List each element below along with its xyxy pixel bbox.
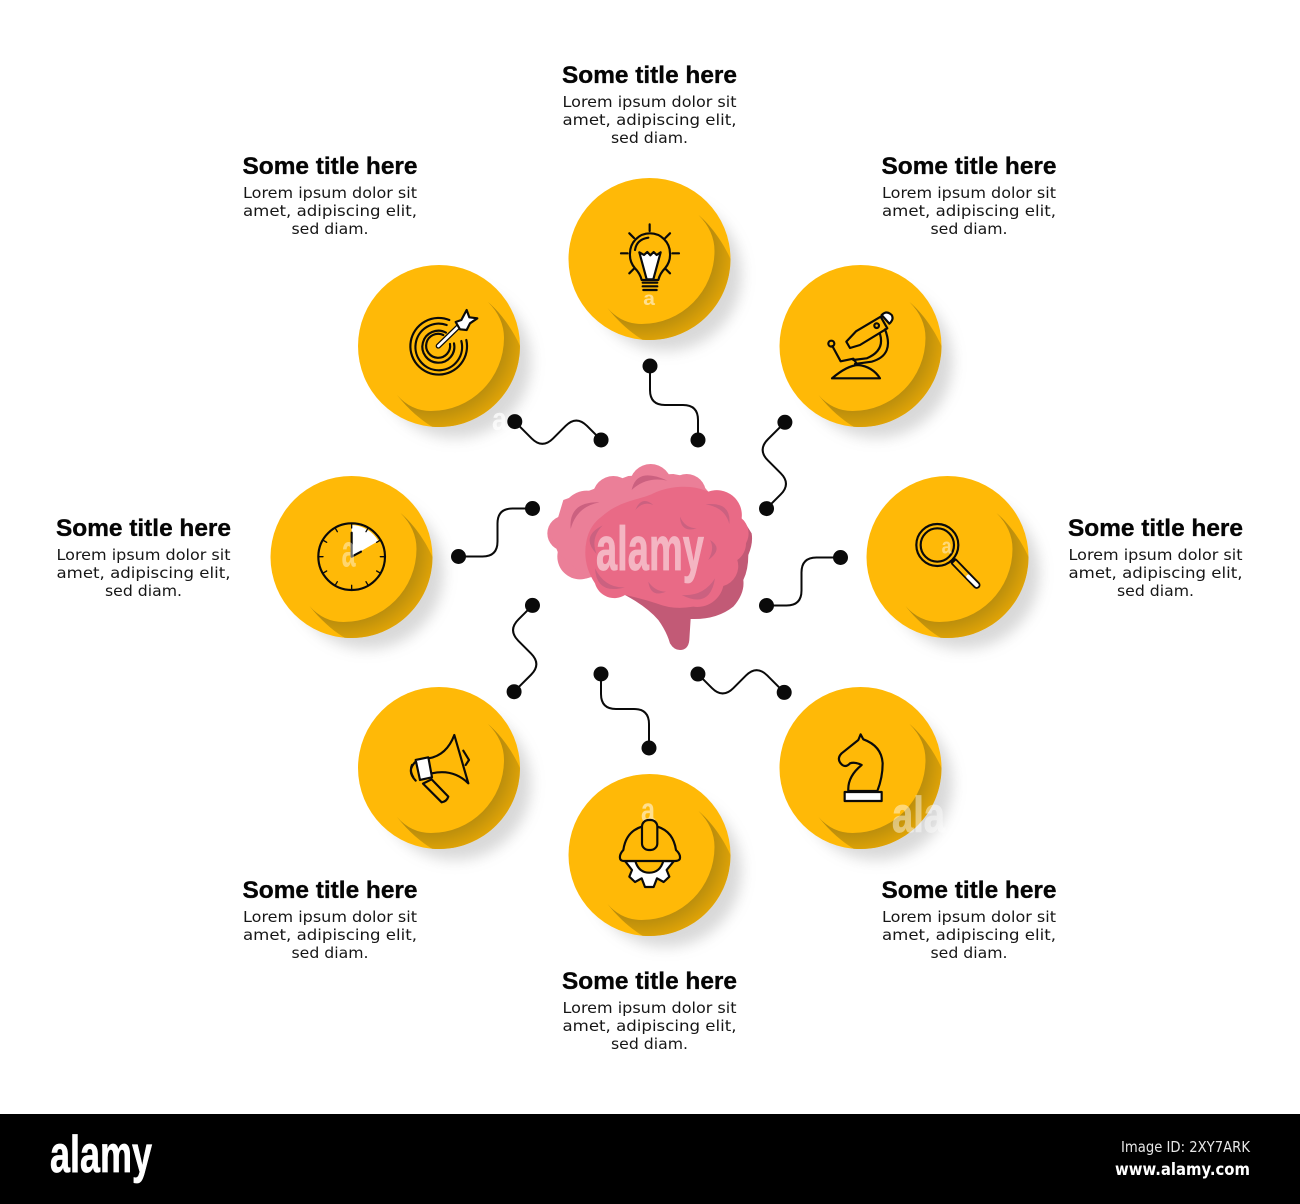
text: right: sed diam. <box>1117 582 1194 600</box>
title: bottom right: Some title here <box>882 877 1056 904</box>
icon: helmet and gear <box>620 792 680 887</box>
icon: chess knight <box>839 734 883 801</box>
connectors <box>451 358 848 756</box>
connector: bottom right <box>687 629 795 737</box>
watermark: alamy on brain: alamy <box>596 515 704 584</box>
text: bottom right: sed diam. <box>930 944 1008 962</box>
title: right: Some title here <box>1068 515 1243 542</box>
brain back lobe <box>547 464 708 579</box>
text: right <box>1068 546 1242 600</box>
connector: top right <box>722 412 829 519</box>
text: top <box>562 93 736 147</box>
text: bottom right <box>882 908 1056 962</box>
text: top: Lorem ipsum dolor sit <box>562 93 736 111</box>
circle: bottom right <box>780 687 952 860</box>
title: top right: Some title here <box>882 153 1056 180</box>
panel: bottom step <box>562 774 742 1053</box>
text: top: sed diam. <box>611 129 688 147</box>
panel: right step <box>866 476 1243 649</box>
text: top left: sed diam. <box>292 220 368 238</box>
connector: bottom <box>594 666 656 756</box>
text: top left <box>243 184 417 238</box>
text: top right <box>882 184 1056 238</box>
circle: top right <box>780 265 952 438</box>
panel: top step <box>562 62 742 351</box>
connector: right <box>759 550 848 613</box>
panel: bottom right step <box>780 687 1056 962</box>
connector: top <box>642 358 706 448</box>
connector: bottom left <box>470 595 577 702</box>
text: right: Lorem ipsum dolor sit <box>1068 546 1242 564</box>
footer bar <box>0 1114 1300 1204</box>
text: bottom left: Lorem ipsum dolor sit <box>243 908 417 926</box>
circle: left <box>270 476 444 649</box>
icon: microscope <box>828 312 893 378</box>
title: top: Some title here <box>562 62 737 89</box>
icon: magnifier <box>916 524 977 585</box>
title: bottom left: Some title here <box>242 877 418 904</box>
panel: bottom left step <box>242 687 531 962</box>
connector: top left <box>504 377 612 485</box>
title: left: Some title here <box>56 515 231 542</box>
brain folds <box>570 475 730 600</box>
text: top right: Lorem ipsum dolor sit <box>882 184 1056 202</box>
brain front lobe <box>585 487 749 608</box>
text: left: sed diam. <box>105 582 182 600</box>
text: bottom left <box>243 908 417 962</box>
icon: megaphone <box>411 735 469 802</box>
text: left <box>56 546 230 600</box>
circle: top left <box>358 265 531 438</box>
title: bottom: Some title here <box>562 968 737 995</box>
footer image id: Image ID: 2XY7ARK <box>1121 1138 1251 1156</box>
text: bottom left: sed diam. <box>292 944 368 962</box>
text: top left: Lorem ipsum dolor sit <box>243 184 417 202</box>
text: bottom right: Lorem ipsum dolor sit <box>882 908 1056 926</box>
text: bottom: sed diam. <box>611 1035 688 1053</box>
text: top left: amet, adipiscing elit, <box>243 202 417 220</box>
panel: top left step <box>242 153 531 438</box>
watermark fragment: a <box>492 401 507 437</box>
icon: light bulb <box>621 224 679 310</box>
title: top left: Some title here <box>242 153 418 180</box>
text: top: amet, adipiscing elit, <box>562 111 736 129</box>
circle: bottom left <box>358 687 531 860</box>
icon: clock: a <box>342 526 356 577</box>
circle: top <box>568 178 742 351</box>
icon: magnifier: a <box>942 533 952 558</box>
connector: left <box>451 501 540 564</box>
footer logo: alamy <box>50 1126 152 1184</box>
icon: helmet and gear: a <box>641 792 656 830</box>
text: bottom <box>562 999 736 1053</box>
icon: central brain <box>547 464 752 650</box>
watermark fragment: ala <box>892 787 946 843</box>
panel: top right step <box>780 153 1056 438</box>
panel: left step <box>56 476 444 649</box>
circle: bottom <box>568 774 742 947</box>
text: top right: amet, adipiscing elit, <box>882 202 1056 220</box>
icon: light bulb: a <box>643 289 655 310</box>
text: left: Lorem ipsum dolor sit <box>56 546 230 564</box>
circle: right <box>866 476 1040 649</box>
text: left: amet, adipiscing elit, <box>56 564 230 582</box>
brain stem and shadow <box>625 520 752 650</box>
text: bottom: Lorem ipsum dolor sit <box>562 999 736 1017</box>
icon: clock <box>318 523 385 590</box>
text: bottom right: amet, adipiscing elit, <box>882 926 1056 944</box>
text: right: amet, adipiscing elit, <box>1068 564 1242 582</box>
text: bottom left: amet, adipiscing elit, <box>243 926 417 944</box>
text: top right: sed diam. <box>930 220 1008 238</box>
footer url: www.alamy.com <box>1115 1160 1250 1179</box>
text: bottom: amet, adipiscing elit, <box>562 1017 736 1035</box>
icon: target with arrow <box>410 310 477 375</box>
